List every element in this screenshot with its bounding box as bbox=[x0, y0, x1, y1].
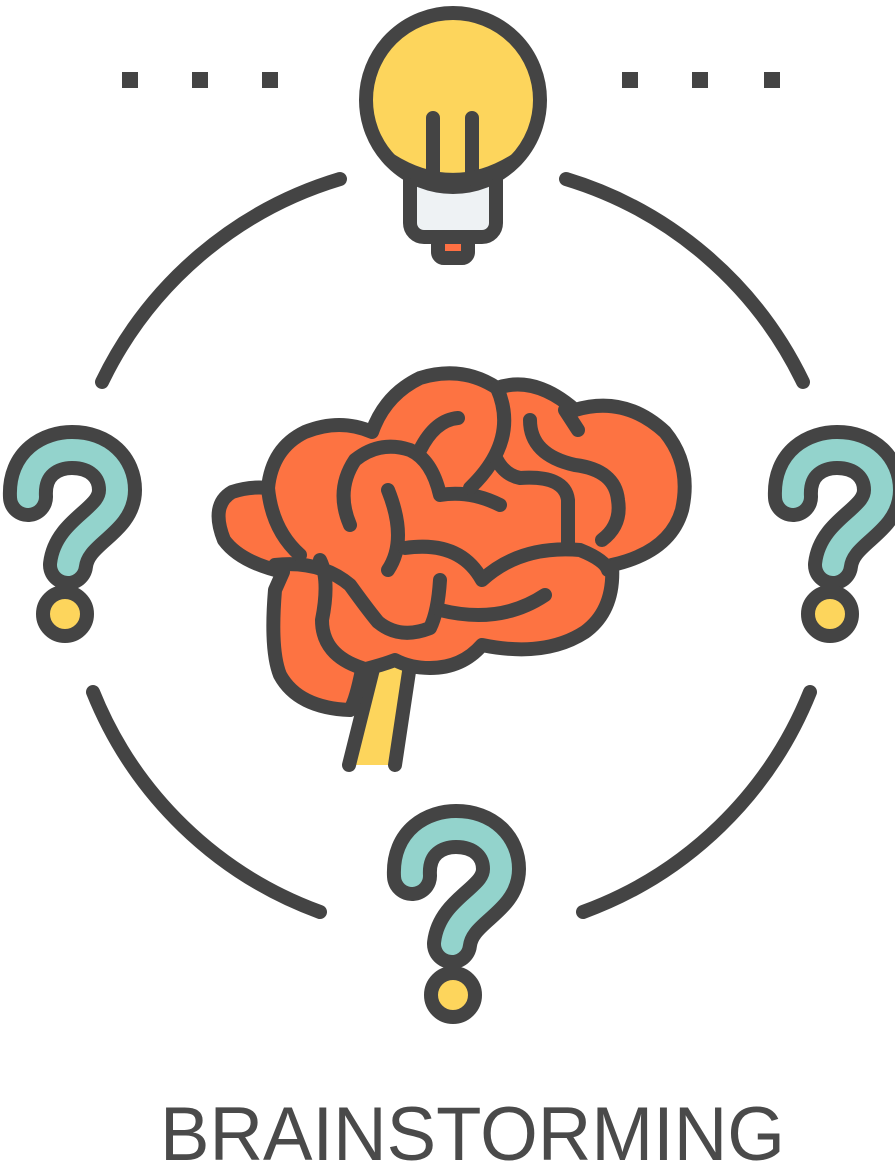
dots: left bbox=[122, 72, 278, 88]
circle arcs bbox=[93, 179, 810, 912]
icon: brain bbox=[219, 373, 685, 765]
icon: question mark left bbox=[28, 450, 117, 636]
icon: question mark bottom bbox=[412, 829, 501, 1017]
icon: question mark right bbox=[793, 450, 882, 636]
icon: light bulb bbox=[366, 13, 540, 258]
dots: right bbox=[622, 72, 780, 88]
